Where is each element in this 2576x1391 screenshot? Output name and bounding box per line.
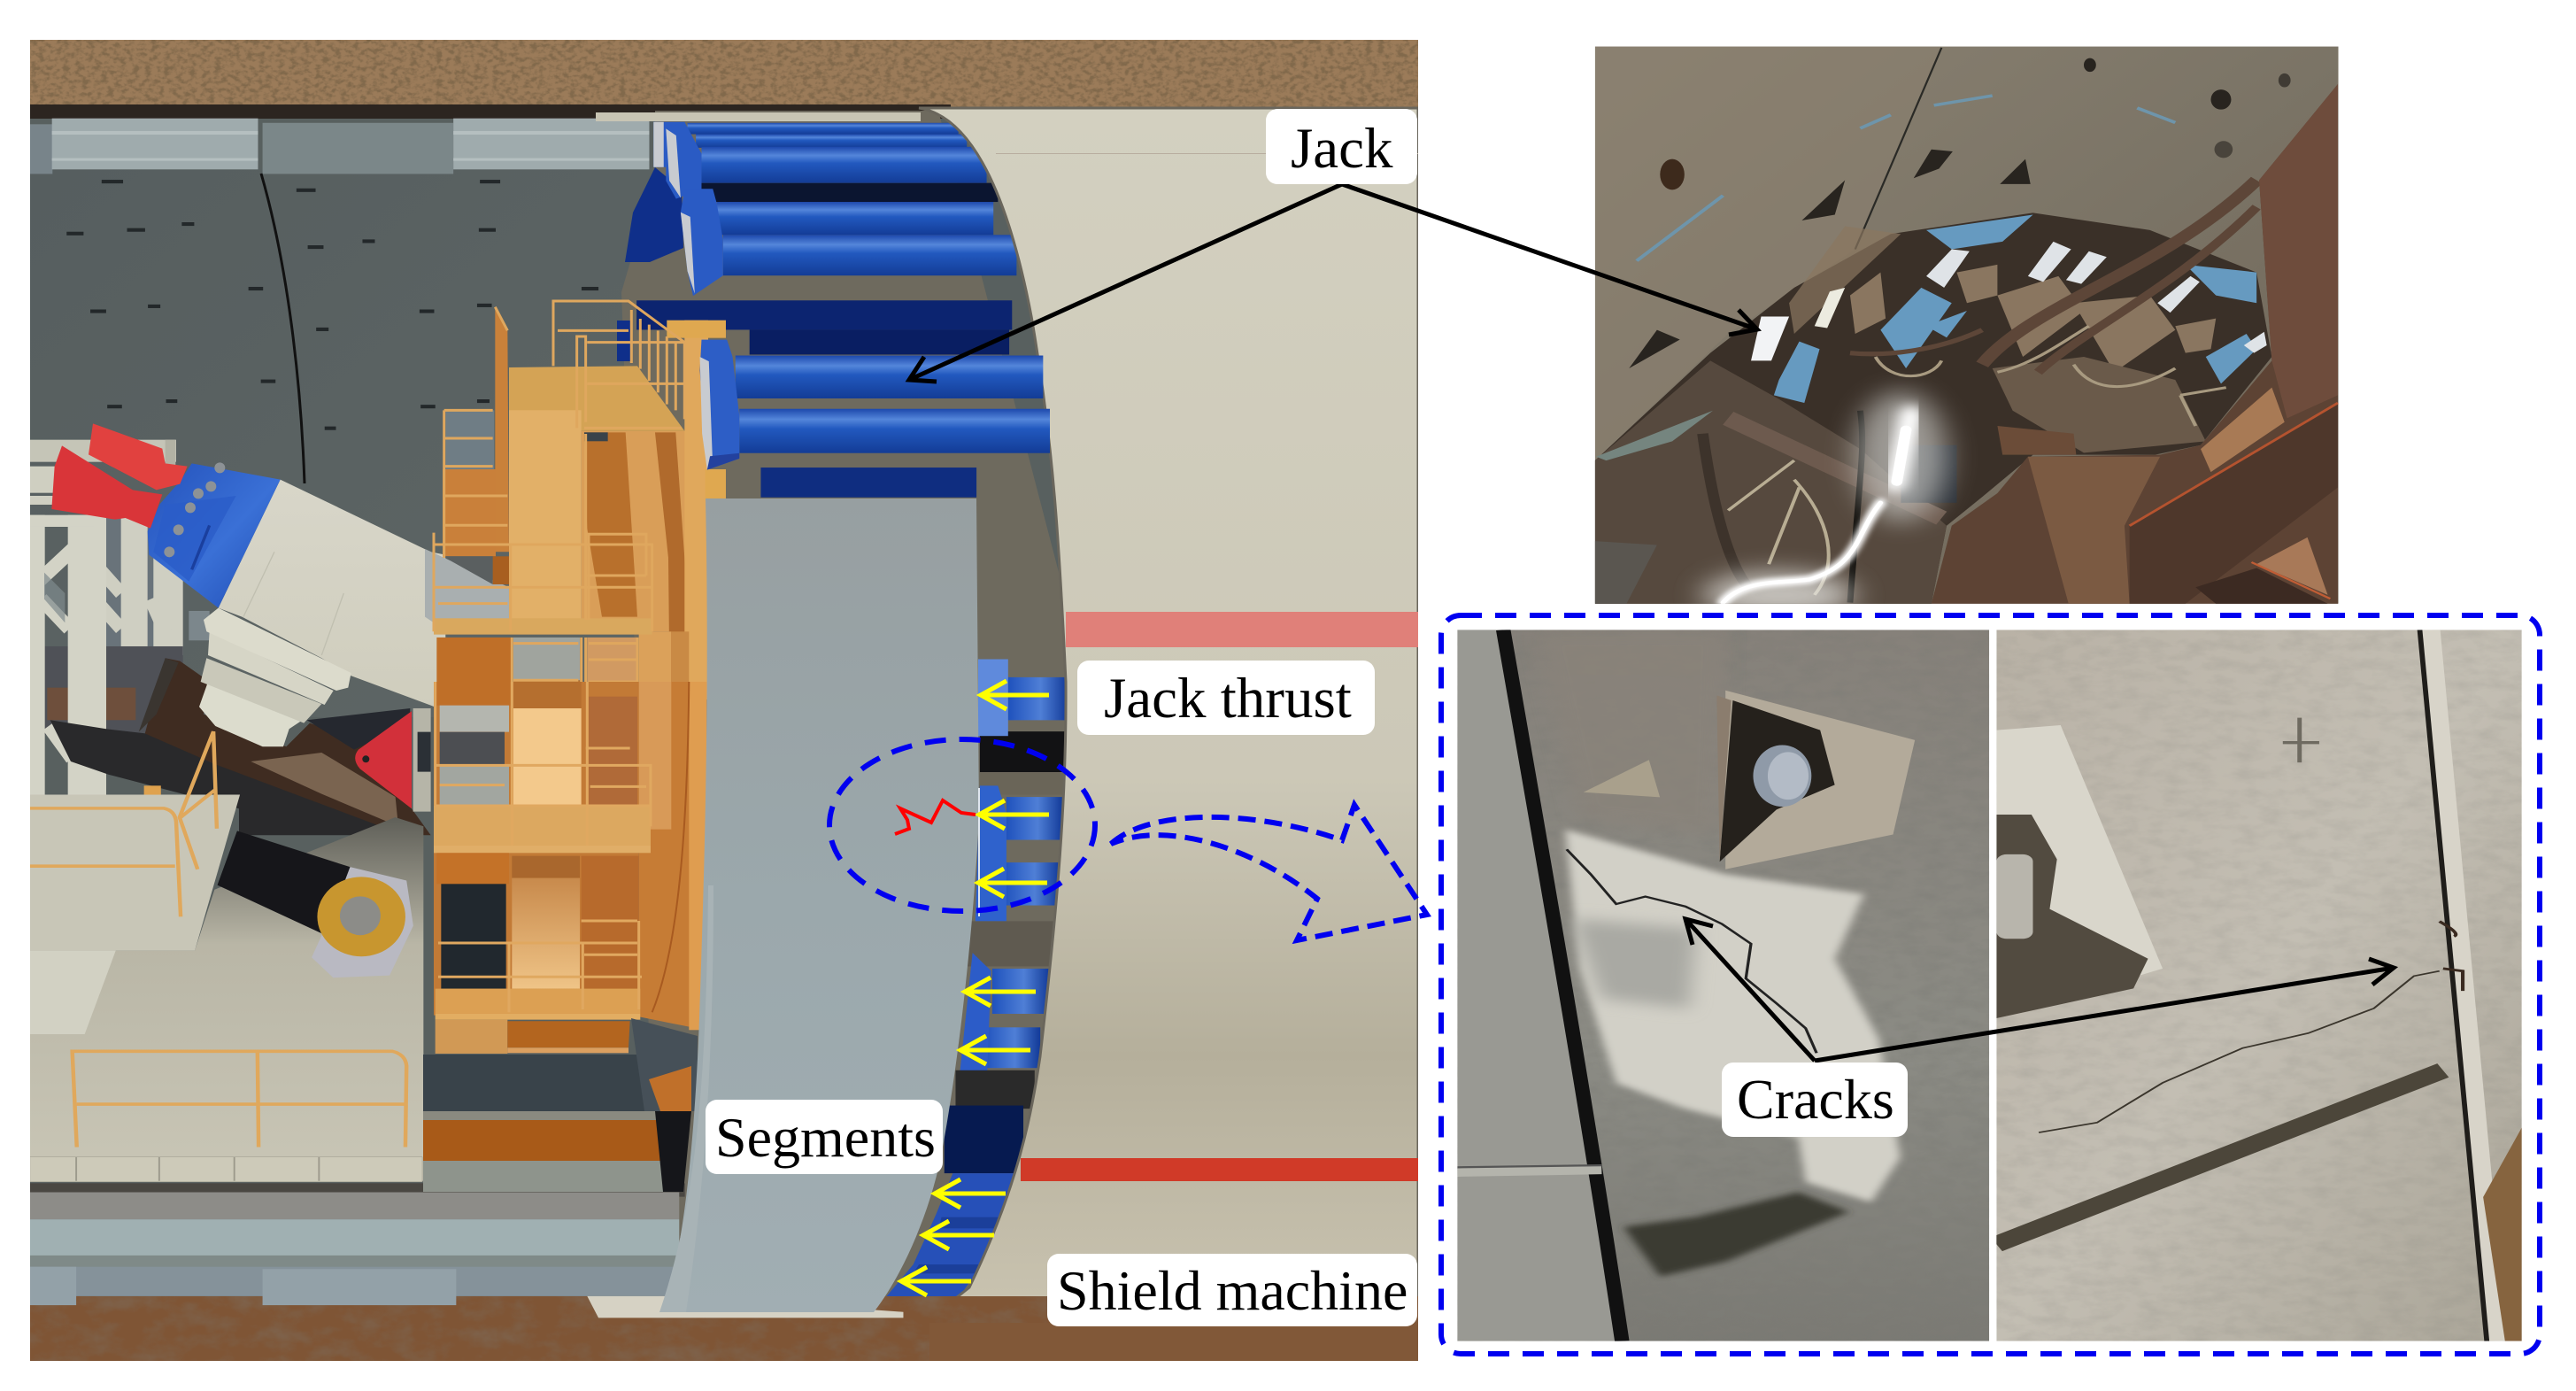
conveyor belt structure: [50, 658, 431, 835]
yellow thrust arrows: [901, 681, 1049, 1295]
arrow: cracks label to right photo: [1815, 959, 2394, 1061]
dashed ellipse: crack location: [829, 739, 1095, 911]
jack with gold block in front of tower: [700, 340, 1050, 470]
label: Segments: Segments: [715, 1106, 936, 1169]
panel: shield machine cutaway render: [30, 40, 1421, 1361]
machine platform body: [30, 785, 423, 1182]
lower left cables and slab: [1596, 411, 1713, 460]
red bands on shield: [1021, 612, 1420, 1181]
cross mark: [2283, 718, 2319, 762]
wood support structure: [1932, 84, 2338, 604]
rails and track base: [30, 1183, 903, 1318]
label: Jack thrust: Jack thrust: [1104, 667, 1352, 730]
photo: jacks inside shield: [1595, 47, 2339, 618]
orange working platform tower upper: [425, 301, 726, 699]
label: Jack: Jack: [1291, 117, 1393, 181]
dashed arrow to crack photos: [1111, 805, 1427, 940]
shield inner cavity: [596, 111, 1071, 1319]
diagonal joint bar: [1996, 1070, 2443, 1244]
shield machine body: [919, 108, 1421, 1323]
safety rails on machine platform: [30, 731, 407, 1148]
bolt pocket: [1996, 725, 2163, 1018]
photo: cracked segment near joint: [1996, 630, 2522, 1341]
crack line: [2039, 971, 2440, 1132]
orange working platform tower lower: [434, 682, 706, 1054]
jacks: lower group of blue hydraulic cylinders: [887, 659, 1065, 1296]
red bracket: [355, 711, 412, 808]
blue collar with bolts: [148, 462, 281, 608]
belt drum: [218, 831, 413, 978]
white repair patch: [1565, 830, 1901, 1202]
segments: concrete ring: [659, 498, 979, 1312]
bolt pocket: [1725, 691, 1915, 869]
label: Shield machine: Shield machine: [1057, 1259, 1408, 1322]
arrow: cracks label to left photo: [1685, 919, 1815, 1061]
panel joint: [1503, 630, 1622, 1341]
soil: top ground layer: [30, 40, 1418, 119]
vertical joint: [2431, 630, 2498, 1341]
soil: bottom ground layer: [30, 1296, 1418, 1361]
photo: cracked segment near bolt pocket: [1457, 630, 1989, 1341]
brown stain: [2483, 1127, 2522, 1341]
tunnel lining wall: [66, 174, 598, 483]
arrow: jack label to render: [909, 184, 1342, 382]
crack line: [1567, 849, 1816, 1053]
bright lamp glare: [1703, 390, 2094, 618]
machinery opening: [1595, 213, 2271, 604]
elbow pipe and flanges: [199, 480, 445, 746]
lower bay and cradle: [423, 1018, 698, 1192]
label: Cracks: Cracks: [1737, 1068, 1894, 1131]
tunnel crown beams: [30, 119, 649, 174]
arrow: jack label to photo: [1342, 184, 1757, 335]
jacks: upper group of blue hydraulic cylinders: [636, 122, 1016, 498]
panel: crack photos dashed frame: [1441, 615, 2540, 1354]
red crack on segment: [895, 800, 976, 834]
label: Jack: [1266, 109, 1417, 184]
gantry truss: [30, 440, 210, 795]
red nozzles: [51, 423, 188, 529]
dark water stain: [1623, 1192, 1849, 1277]
